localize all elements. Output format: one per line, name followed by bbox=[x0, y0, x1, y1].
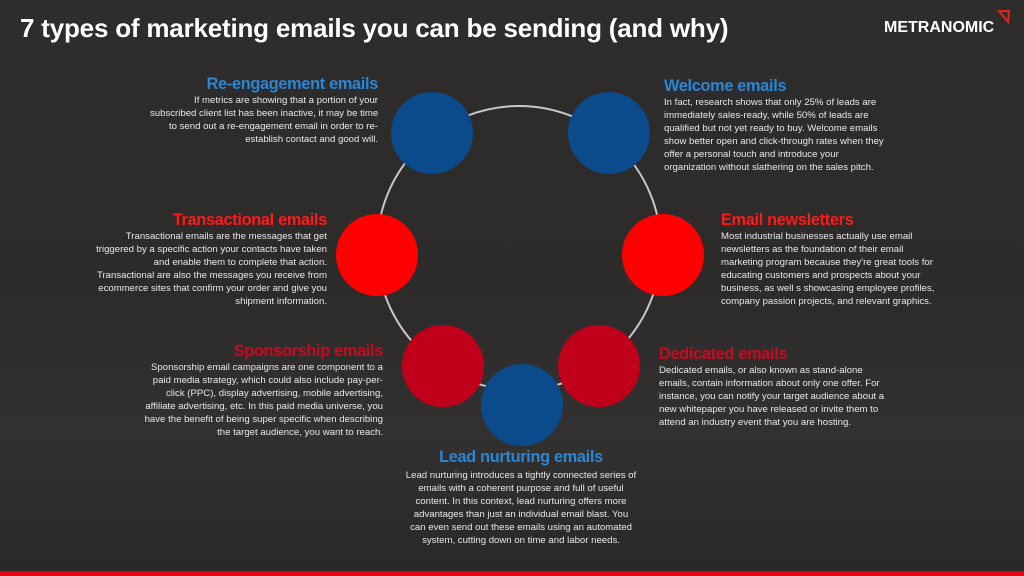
block: re-engagement: to send out a re-engagement email in order to re- bbox=[169, 121, 378, 132]
block: newsletters: Most industrial businesses actually use email bbox=[721, 231, 912, 242]
logo: METRANOMIC bbox=[884, 19, 994, 36]
block: lead nurturing: Lead nurturing introduces a tightly connected series of bbox=[406, 470, 636, 481]
block: sponsorship: the target audience, you want to reach. bbox=[217, 427, 383, 438]
block: lead nurturing: content. In this context, lead nurturing offers more bbox=[415, 496, 626, 507]
block: newsletters: newsletters as the foundation of their email bbox=[721, 244, 903, 255]
block: sponsorship: Sponsorship email campaigns are one component to a bbox=[151, 362, 383, 373]
block: welcome bbox=[664, 77, 884, 173]
block: dedicated: emails, contain information about only one offer. For bbox=[659, 378, 880, 389]
block: sponsorship: affiliate advertising, etc. In this paid media universe, you bbox=[145, 401, 383, 412]
circle: dedicated bbox=[558, 325, 640, 407]
block: re-engagement: establish contact and good will. bbox=[245, 134, 378, 145]
block: sponsorship: paid media strategy, which could also include pay-per- bbox=[153, 375, 383, 386]
block: sponsorship bbox=[145, 342, 383, 438]
block: lead nurturing: emails with a coherent purpose and full of useful bbox=[418, 483, 624, 494]
block: lead nurturing: can even send out these emails using an automated bbox=[410, 522, 632, 533]
block: dedicated: attend an industry event that you are hosting. bbox=[659, 417, 851, 428]
block: welcome: immediately sales-ready, while 50% of leads are bbox=[664, 110, 869, 121]
block: transactional: Transactional emails are the messages that get bbox=[126, 231, 327, 242]
block: transactional: Transactional are also the messages you receive from bbox=[97, 270, 327, 281]
block: sponsorship: have the benefit of being super specific when describing bbox=[145, 414, 383, 425]
block: welcome: Welcome emails bbox=[664, 77, 786, 95]
block: dedicated: Dedicated emails, or also known as stand-alone bbox=[659, 365, 863, 376]
block: welcome: In fact, research shows that only 25% of leads are bbox=[664, 97, 876, 108]
block: dedicated: instance, you can notify your target audience about a bbox=[659, 391, 884, 402]
block: transactional: shipment information. bbox=[235, 296, 327, 307]
block: newsletters: Email newsletters bbox=[721, 211, 853, 229]
circle: re-engagement bbox=[391, 92, 473, 174]
block: welcome: show better open and click-through rates when they bbox=[664, 136, 884, 147]
block: dedicated: new whitepaper you have released or invite them to bbox=[659, 404, 878, 415]
block: transactional bbox=[96, 211, 327, 307]
circle: lead nurturing bbox=[481, 364, 563, 446]
block: newsletters: marketing program because they're great tools for bbox=[721, 257, 933, 268]
block: transactional: triggered by a specific action your contacts have taken bbox=[96, 244, 327, 255]
block: re-engagement bbox=[150, 75, 378, 145]
block: transactional: and enable them to complete that action. bbox=[154, 257, 327, 268]
block: newsletters bbox=[721, 211, 934, 307]
block: welcome: organization without slathering on the sales pitch. bbox=[664, 162, 874, 173]
block: dedicated: Dedicated emails bbox=[659, 345, 787, 363]
circle: sponsorship bbox=[402, 325, 484, 407]
block: lead nurturing: Lead nurturing emails bbox=[439, 448, 603, 466]
block: sponsorship: Sponsorship emails bbox=[234, 342, 383, 360]
block: re-engagement: subscribed client list has been inactive, it may be time bbox=[150, 108, 378, 119]
circle: transactional bbox=[336, 214, 418, 296]
block: welcome: offer a personal touch and introduce your bbox=[664, 149, 839, 160]
block: lead nurturing: system, cutting down on time and labor needs. bbox=[422, 535, 620, 546]
logo bbox=[884, 10, 1010, 36]
block: welcome: qualified but not yet ready to buy. Welcome emails bbox=[664, 123, 877, 134]
block: lead nurturing: advantages than just an individual email blast. You bbox=[414, 509, 628, 520]
block: newsletters: business, as well s showcasing employee profiles, bbox=[721, 283, 934, 294]
block: lead nurturing bbox=[406, 448, 636, 546]
block: dedicated bbox=[659, 345, 884, 428]
circle: welcome bbox=[568, 92, 650, 174]
block: re-engagement: If metrics are showing that a portion of your bbox=[194, 95, 378, 106]
bottom bar bbox=[0, 571, 1024, 576]
circle: newsletters bbox=[622, 214, 704, 296]
block: sponsorship: click (PPC), display advertising, mobile advertising, bbox=[166, 388, 383, 399]
block: re-engagement: Re-engagement emails bbox=[207, 75, 378, 93]
block: newsletters: company passion projects, and relevant graphics. bbox=[721, 296, 932, 307]
block: transactional: Transactional emails bbox=[173, 211, 327, 229]
block: transactional: ecommerce sites that confirm your order and give you bbox=[98, 283, 327, 294]
block: newsletters: educating customers and prospects about your bbox=[721, 270, 920, 281]
title: 7 types of marketing emails you can be sending (and why) bbox=[20, 13, 728, 43]
